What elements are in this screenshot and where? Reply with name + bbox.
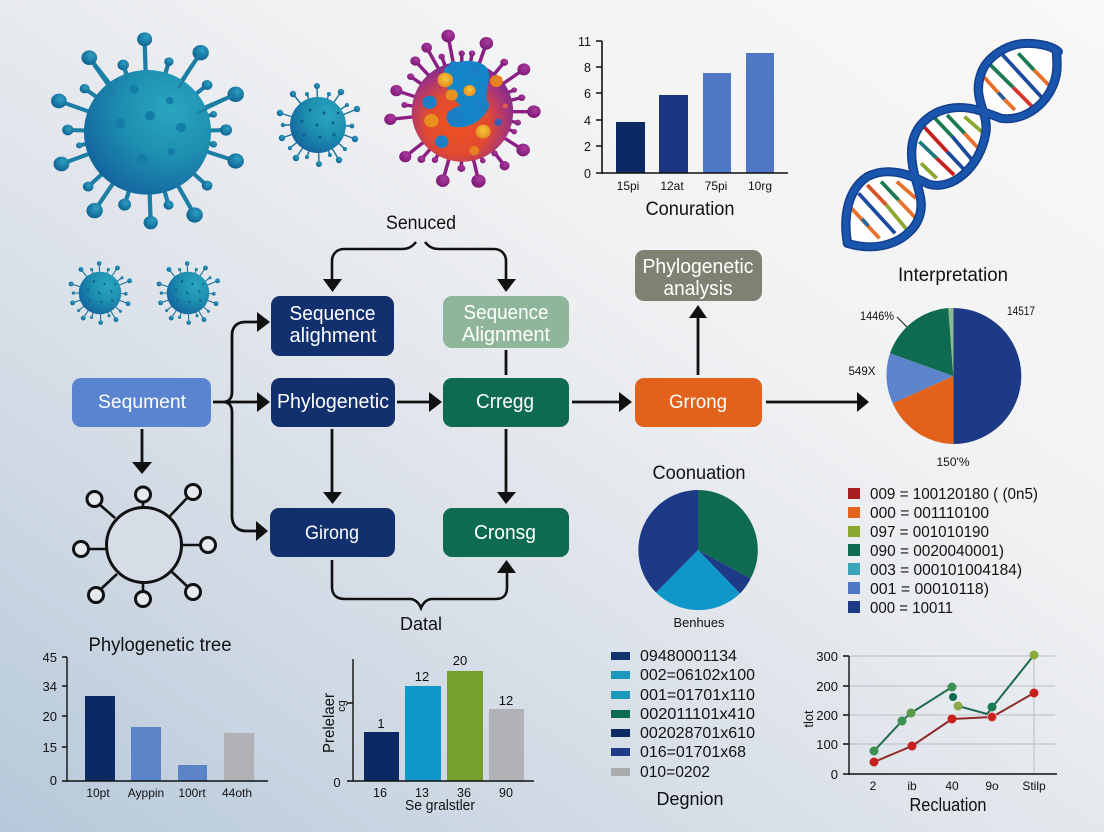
icon: small virus right [157,261,220,325]
step: Sequence Alignment: Alignment [462,324,550,346]
step: Phylogenetic: Phylogenetic [277,391,389,413]
pie chart: right: 150'% [936,455,970,469]
bar chart: top: 10rg [748,179,772,193]
arrow: Crregg to Grrong [572,392,632,412]
step: Sequence Alignment [443,296,569,348]
bar chart: top: 0 [584,167,591,181]
bar chart: bottom centre: 90 [499,786,513,800]
line chart: bottom right: 200 [816,679,838,694]
heading: Recluation: Recluation [910,794,986,815]
pie chart: centre [638,490,758,610]
pie chart: right [848,304,1035,469]
bar chart: bottom centre [321,653,534,814]
step: Girong [270,508,395,557]
legend: right: 003 = 000101004184) [870,562,1022,579]
icon: large teal virus [51,32,244,229]
bar chart: bottom centre: 12 [415,669,429,684]
heading: Conuration: Conuration [646,199,734,220]
heading: Degnion: Degnion [656,788,724,809]
step: Sequment [72,378,211,427]
bar chart: top: 11 [578,35,591,49]
arrow: Sequence Alignment to Crregg [505,350,507,375]
line chart: bottom right: ib [907,779,917,793]
line chart: bottom right: tlot [801,710,816,728]
step: Crregg [443,378,569,427]
icon: purple and orange virus [384,30,541,188]
icon: virion outline [74,484,216,606]
line chart: bottom right: 2 [870,779,877,793]
bar chart: bottom centre: 20 [453,653,467,668]
pie chart: right: 549X [848,364,876,378]
bar chart: top: 2 [584,140,591,154]
step: Phylogenetic [271,378,395,427]
bar chart: top: 8 [584,61,591,75]
icon: DNA double helix [846,43,1058,247]
legend: bottom centre: 002011101x410 [640,706,755,723]
legend: bottom centre: 002=06102x100 [640,667,755,684]
legend: bottom centre: 001=01701x110 [640,687,755,704]
pie chart: right: 1446% [860,309,894,323]
line chart: bottom right: 100 [816,737,838,752]
bar chart: bottom left: 34 [43,679,57,694]
label: Senuced: Senuced [386,213,456,234]
bar chart: bottom centre: Se gralstler [405,797,475,814]
heading: Interpretation: Interpretation [898,265,1008,286]
legend: bottom centre [611,648,755,781]
legend: bottom centre: 002028701x610 [640,725,755,742]
legend: right: 009 = 100120180 ( (0n5) [870,486,1038,503]
legend: right: 090 = 0020040001) [870,543,1004,560]
line chart: bottom right: 40 [945,779,959,793]
arrow: Phylogenetic to Girong [323,429,342,504]
legend: bottom centre: 016=01701x68 [640,744,746,761]
bar chart: bottom centre: cg [336,700,348,712]
arrow: Grrong to Phylogenetic analysis [689,305,707,375]
icon: small teal virus [277,83,360,167]
arrow: Girong to Cronsg via Datal [332,560,516,608]
bar chart: top: 75pi [705,179,727,193]
label: Benhues: Benhues [674,616,724,630]
arrow: Senuced to Sequence Alignment [425,242,516,292]
step: Phylogenetic analysis: Phylogenetic [642,256,754,278]
legend: bottom centre: 09480001134 [640,648,737,665]
bar chart: bottom left: 45 [43,650,57,665]
bar chart: bottom centre: 12 [499,693,513,708]
bar chart: top [578,35,788,193]
legend: right: 000 = 001110100 [870,505,989,522]
legend: bottom centre: 010=0202 [640,764,710,781]
bar chart: bottom left: 10pt [86,786,110,800]
step: Phylogenetic analysis [635,250,762,301]
icon: small virus left [69,261,132,325]
arrow: Sequment to virion icon [132,429,152,474]
step: Grrong: Grrong [669,391,727,413]
step: Sequence Alignment: Sequence [464,302,548,324]
step: Girong: Girong [305,523,359,544]
bar chart: top: 12at [660,179,684,193]
arrow: Phylogenetic to Crregg [397,392,442,412]
legend: right [848,486,1038,617]
bar chart: top: 6 [584,87,591,101]
bar chart: bottom left [43,650,268,800]
heading: Coonuation: Coonuation [652,463,746,484]
line chart: bottom right: 9o [985,779,999,793]
bar chart: top: 4 [584,114,591,128]
bar chart: bottom left: Ayppin [128,786,164,800]
bar chart: bottom centre: 16 [373,786,387,800]
bar chart: bottom left: 0 [50,773,57,788]
bar chart: bottom left: 44oth [222,786,252,800]
step: Grrong [635,378,762,427]
line chart: bottom right: 0 [831,767,838,782]
bar chart: bottom centre: 0 [333,775,341,790]
legend: right: 000 = 10011 [870,600,953,617]
line chart: bottom right: 300 [816,649,838,664]
bar chart: bottom centre: 36 [457,786,471,800]
bar chart: bottom centre: Prelelaer [321,693,338,753]
bar chart: bottom left: 15 [43,740,57,755]
line chart: bottom right: Stilp [1022,779,1046,793]
bar chart: bottom centre: 13 [415,786,429,800]
line chart: bottom right: 200 [816,708,838,723]
bar chart: bottom left: 100rt [178,786,206,800]
arrow: Senuced to Sequence alignment [323,242,416,292]
legend: right: 097 = 001010190 [870,524,989,541]
bar chart: bottom centre: 1 [377,716,385,731]
arrow: Grrong to pie chart [766,392,869,412]
pie chart: right: 14517 [1007,304,1035,318]
line chart: bottom right [801,649,1057,793]
arrow: Crregg to Cronsg [497,429,516,504]
step: Sequence alignment [271,296,394,356]
step: Cronsg [443,508,569,557]
step: Phylogenetic analysis: analysis [664,278,732,300]
step: Sequence alignment: alighment [290,325,377,347]
heading: Phylogenetic tree: Phylogenetic tree [88,635,232,656]
arrow: Sequment branches [213,312,270,541]
step: Crregg: Crregg [476,391,534,413]
bar chart: bottom left: 20 [43,709,57,724]
step: Sequence alignment: Sequence [290,303,376,325]
label: Datal: Datal [400,613,442,634]
bar chart: top: 15pi [617,179,639,193]
step: Sequment: Sequment [98,391,187,413]
legend: right: 001 = 00010118) [870,581,989,598]
step: Cronsg: Cronsg [474,522,536,544]
